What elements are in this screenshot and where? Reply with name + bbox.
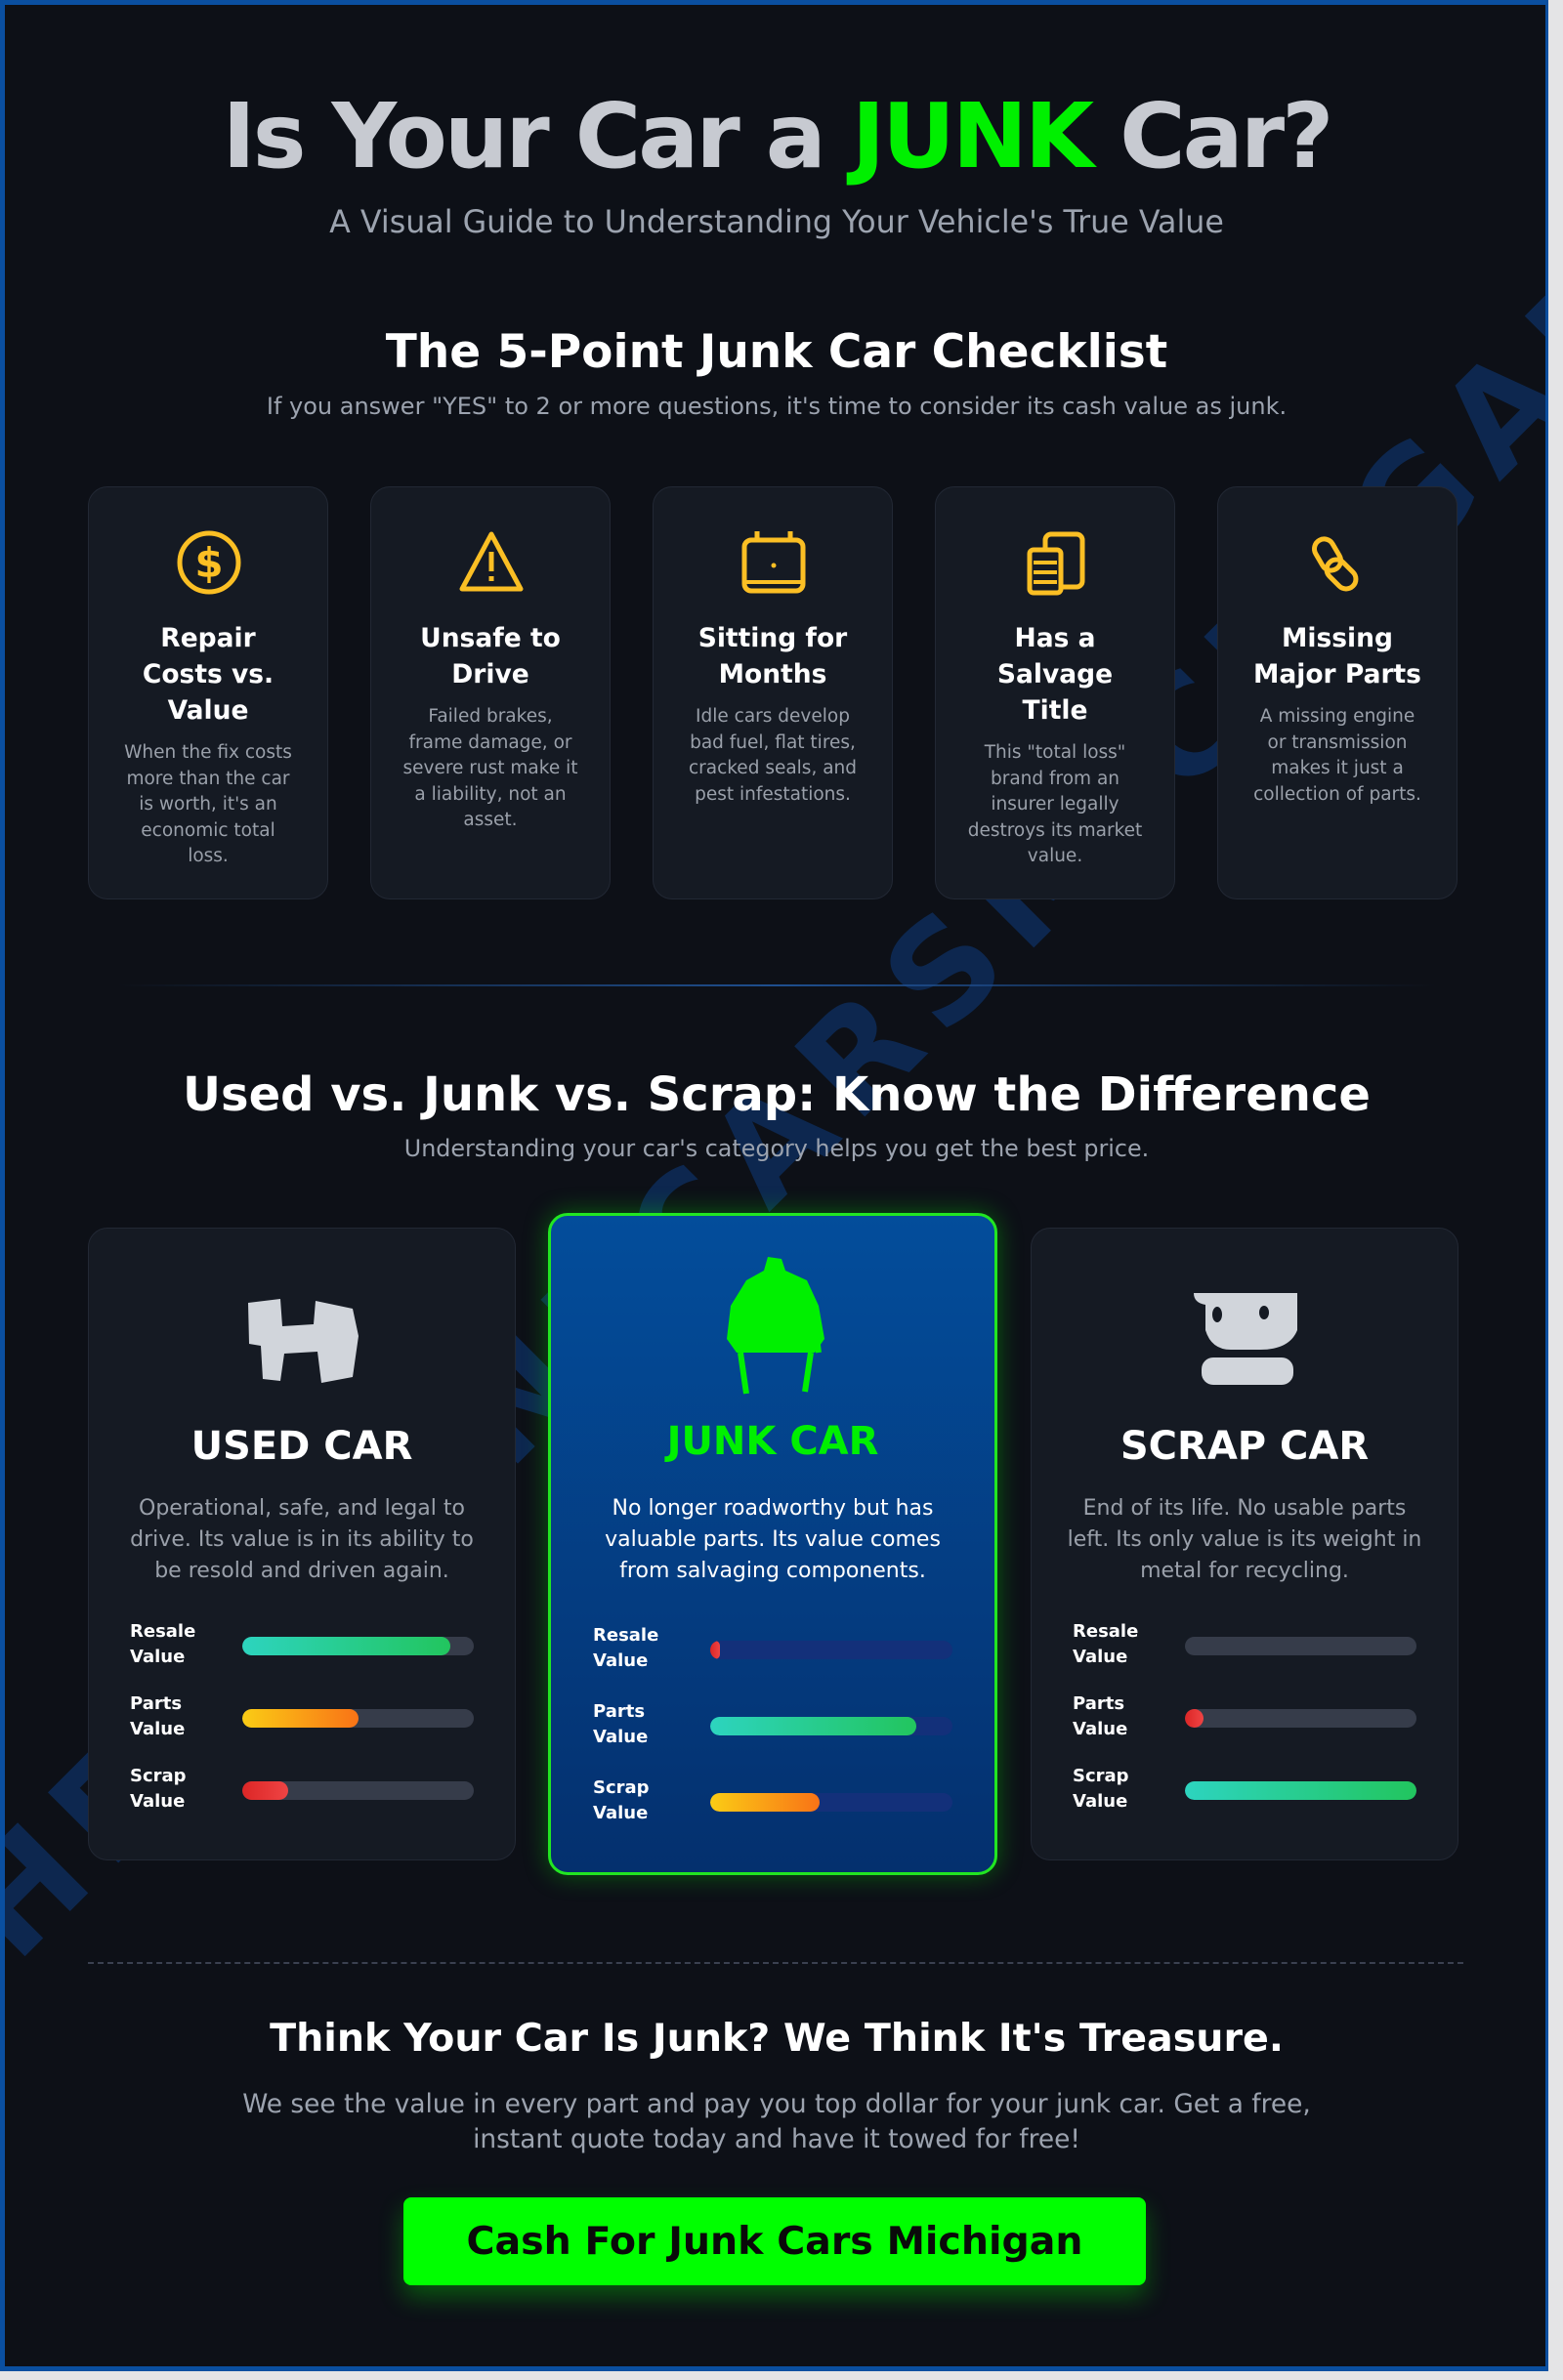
bars: Value	[593, 1727, 648, 1747]
card title	[1253, 623, 1421, 805]
comparison subtext: Understanding your car's category helps you get the best price.	[404, 1135, 1149, 1162]
title: USED CAR	[191, 1424, 412, 1469]
bars: Value	[130, 1647, 185, 1667]
cta text: We see the value in every part and pay you top dollar for your junk car. Get a free, instant quote today and have it towed for free!	[242, 2089, 1311, 2154]
panel: scrap car	[1031, 1228, 1458, 1860]
icon: junk car	[727, 1257, 824, 1395]
card title: Idle cars develop bad fuel, flat tires, cracked seals, and pest infestations.	[689, 706, 857, 805]
icon: warning	[459, 531, 524, 592]
card title: A missing engine or transmission makes it just a collection of parts.	[1253, 706, 1421, 805]
title: Is Your Car a JUNK Car?	[222, 84, 1331, 188]
card title: Unsafe to Drive	[420, 623, 561, 689]
comparison heading: Used vs. Junk vs. Scrap: Know the Difference	[183, 1067, 1371, 1122]
icon: dollar	[178, 531, 240, 594]
title: JUNK CAR	[667, 1419, 878, 1464]
bars: Scrap	[130, 1766, 187, 1786]
card title: Has a Salvage Title	[997, 623, 1113, 726]
card: repair costs	[88, 486, 328, 899]
bars: Resale	[130, 1621, 195, 1642]
card title	[689, 623, 857, 805]
bars	[130, 1621, 474, 1812]
panel: used car	[88, 1228, 516, 1860]
cta heading: Think Your Car Is Junk? We Think It's Treasure.	[270, 2016, 1284, 2061]
card title: Missing Major Parts	[1253, 623, 1421, 689]
desc: Operational, safe, and legal to drive. Its value is in its ability to be resold and driven again.	[130, 1496, 474, 1583]
bars: Parts	[593, 1701, 645, 1722]
card title: Sitting for Months	[698, 623, 847, 689]
icon: used car	[248, 1299, 359, 1383]
icon: wrench	[1312, 536, 1358, 592]
bars: Parts	[1073, 1693, 1124, 1714]
bars: Value	[593, 1650, 648, 1671]
card: missing parts	[1217, 486, 1457, 899]
bars: Value	[1073, 1647, 1127, 1667]
bars: Value	[130, 1719, 185, 1739]
desc: End of its life. No usable parts left. Its only value is its weight in metal for recycling.	[1068, 1496, 1421, 1583]
title: SCRAP CAR	[1120, 1424, 1369, 1469]
cta button: Cash For Junk Cars Michigan	[466, 2219, 1083, 2264]
icon: clipboard	[1028, 531, 1084, 596]
bars: Resale	[1073, 1621, 1138, 1642]
checklist heading: The 5-Point Junk Car Checklist	[386, 325, 1167, 379]
cta button	[403, 2197, 1146, 2285]
card title: This "total loss" brand from an insurer legally destroys its market value.	[968, 742, 1142, 866]
card: salvage	[935, 486, 1175, 899]
icon: calendar	[742, 531, 805, 594]
subtitle: A Visual Guide to Understanding Your Vehicle's True Value	[329, 205, 1224, 240]
icon: dollar: $	[194, 539, 224, 587]
bars: Scrap	[593, 1777, 650, 1798]
card title: When the fix costs more than the car is worth, it's an economic total loss.	[124, 742, 292, 866]
card title: Repair Costs vs. Value	[143, 623, 274, 726]
bars: Value	[1073, 1791, 1127, 1812]
bars: Value	[593, 1803, 648, 1823]
card title: Failed brakes, frame damage, or severe rust make it a liability, not an asset.	[402, 706, 577, 830]
card title	[402, 623, 578, 830]
checklist subtext: If you answer "YES" to 2 or more questions, it's time to consider its cash value as junk.	[267, 393, 1287, 420]
bars	[593, 1625, 952, 1823]
bars: Value	[130, 1791, 185, 1812]
card: unsafe	[370, 486, 611, 899]
card title	[124, 623, 292, 866]
desc: No longer roadworthy but has valuable parts. Its value comes from salvaging components.	[605, 1496, 941, 1583]
card title	[968, 623, 1142, 866]
bars	[1073, 1621, 1416, 1812]
bars: Parts	[130, 1693, 182, 1714]
icon: scrap car	[1194, 1293, 1297, 1385]
panel: junk car	[548, 1213, 997, 1875]
bars: Value	[1073, 1719, 1127, 1739]
bars: Scrap	[1073, 1766, 1129, 1786]
card: sitting	[653, 486, 893, 899]
bars: Resale	[593, 1625, 658, 1646]
